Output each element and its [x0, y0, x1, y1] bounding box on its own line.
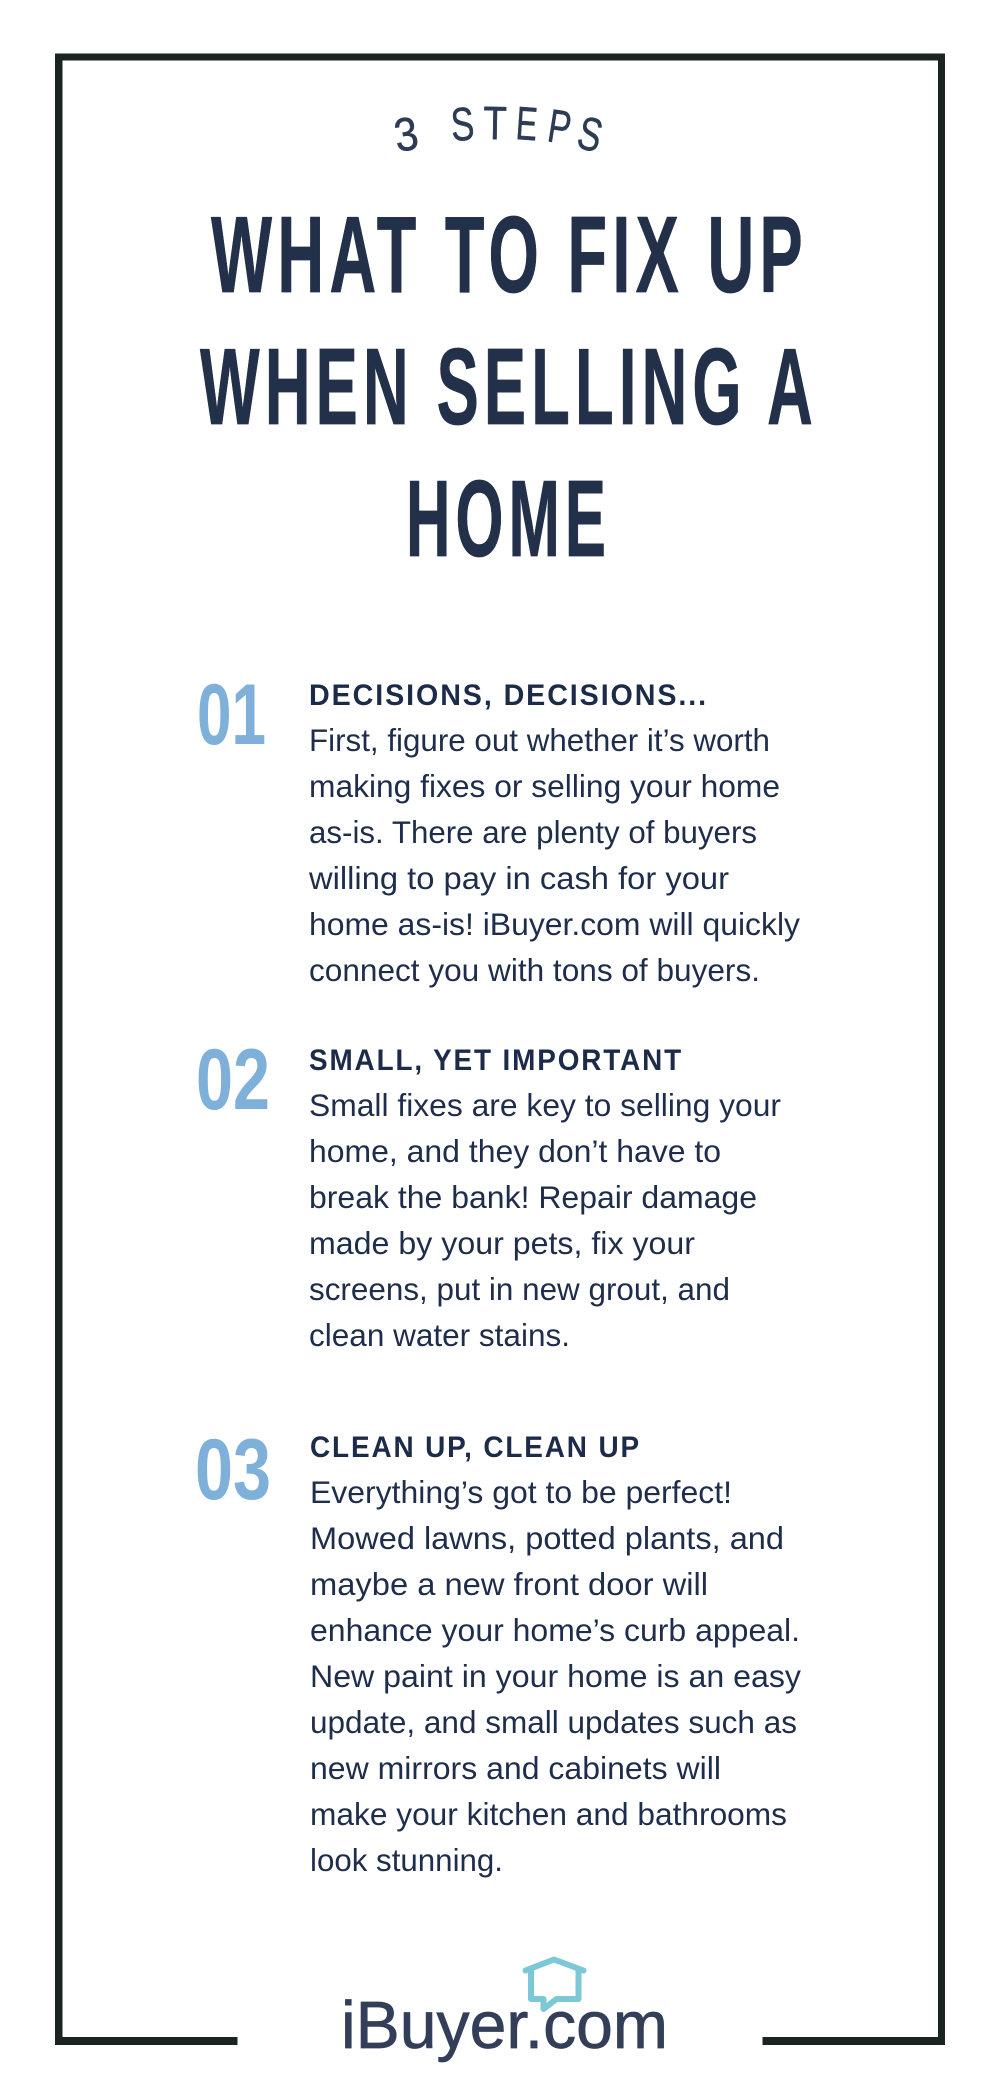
step 1 body text: connect you with tons of buyers.	[309, 952, 760, 988]
arched kicker: 3 STEPS	[391, 97, 608, 163]
step 3 body text: make your kitchen and bathrooms	[310, 1796, 787, 1832]
arched kicker: 3 STEPS: E	[514, 97, 539, 151]
step 3 body text: enhance your home’s curb appeal.	[310, 1612, 800, 1648]
step 3	[195, 1422, 801, 1878]
step 2 body text	[309, 1087, 781, 1353]
step 1 heading: DECISIONS, DECISIONS...	[309, 679, 708, 712]
step 1 body text: willing to pay in cash for your	[308, 860, 729, 896]
step 2 body text: clean water stains.	[309, 1317, 570, 1353]
step 3 body text: Everything’s got to be perfect!	[310, 1474, 732, 1510]
step 3 body text: look stunning.	[310, 1842, 503, 1878]
number 01: 01	[197, 667, 266, 763]
step 3 body text: update, and small updates such as	[310, 1704, 797, 1740]
step 1 body text: making fixes or selling your home	[309, 768, 780, 804]
arched kicker: 3 STEPS: 3	[391, 108, 422, 162]
arched kicker: 3 STEPS: S	[573, 106, 608, 163]
step 2 body text: made by your pets, fix your	[309, 1225, 695, 1261]
step 1 body text: home as-is! iBuyer.com will quickly	[309, 906, 800, 942]
wordmark: iBuyer.com	[341, 1988, 668, 2063]
step 2 body text: home, and they don’t have to	[309, 1133, 721, 1169]
step 2 body text: screens, put in new grout, and	[309, 1271, 730, 1307]
step 2 body text: Small fixes are key to selling your	[309, 1087, 781, 1123]
icon: house speech bubble	[526, 1960, 584, 2009]
number 03: 03	[195, 1422, 271, 1518]
arched kicker: 3 STEPS: P	[544, 99, 575, 155]
step 2 heading: SMALL, YET IMPORTANT	[309, 1044, 683, 1077]
arched kicker: 3 STEPS: S	[449, 97, 476, 151]
step 1	[197, 667, 800, 988]
step 3 body text: maybe a new front door will	[310, 1566, 708, 1602]
step 1 body text	[308, 722, 800, 988]
step 2	[196, 1032, 781, 1353]
step 3 body text: Mowed lawns, potted plants, and	[310, 1520, 784, 1556]
step 1 body text: First, figure out whether it’s worth	[309, 722, 770, 758]
step 3 body text	[310, 1474, 801, 1878]
title	[200, 194, 818, 580]
logo	[341, 1960, 668, 2063]
title: HOME	[406, 458, 611, 580]
step 3 body text: new mirrors and cabinets will	[310, 1750, 721, 1786]
step 3 body text: New paint in your home is an easy	[310, 1658, 801, 1694]
arched kicker: 3 STEPS: T	[483, 97, 507, 150]
number 02: 02	[196, 1032, 270, 1128]
step 2 body text: break the bank! Repair damage	[309, 1179, 757, 1215]
step 1 body text: as-is. There are plenty of buyers	[309, 814, 757, 850]
step 3 heading: CLEAN UP, CLEAN UP	[310, 1431, 641, 1464]
